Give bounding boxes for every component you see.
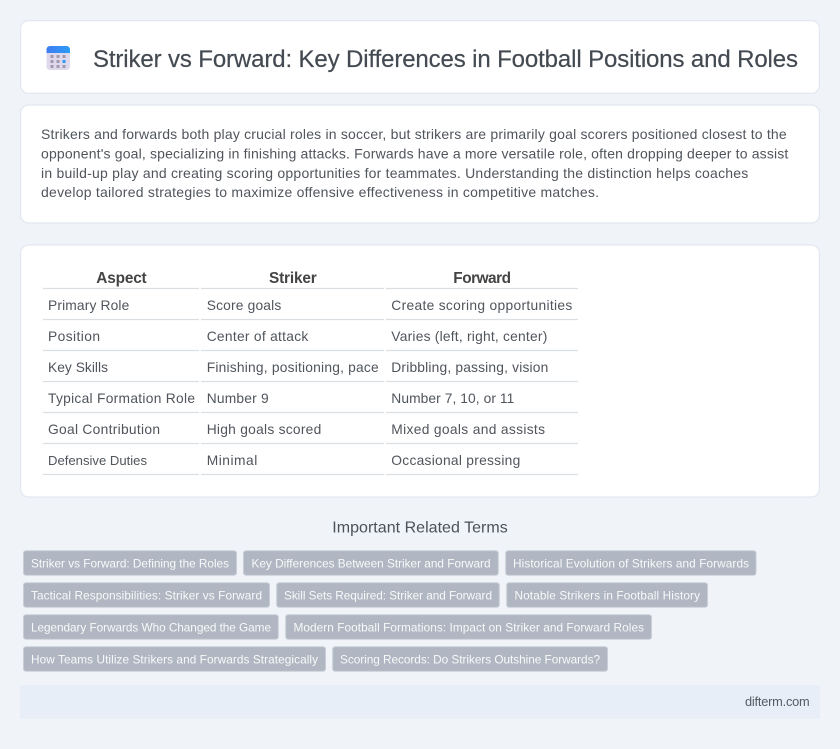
icon: calendar <box>46 46 70 70</box>
heading: important related terms: Important Related Terms <box>332 520 508 537</box>
tag <box>277 583 499 607</box>
row: defensive duties: Defensive Duties <box>48 453 147 468</box>
text block: intro: in build-up play and creating scoring opportunities for teammates. Understanding the distinction helps coaches <box>41 165 748 181</box>
text block: intro: opponent's goal, specializing in finishing attacks. Forwards have a more versatile role, often dropping deeper to assist <box>41 146 788 162</box>
tag <box>244 551 498 575</box>
row: key skills: Dribbling, passing, vision <box>391 360 548 375</box>
tag list: related terms <box>24 551 756 671</box>
row: defensive duties: Minimal <box>207 453 257 468</box>
tag <box>507 583 708 607</box>
row: primary role: Score goals <box>207 298 281 313</box>
table header: Forward <box>453 270 511 287</box>
row: primary role: Create scoring opportunities <box>391 298 572 313</box>
tag: Notable Strikers in Football History <box>514 588 700 602</box>
row: key skills <box>48 360 548 375</box>
row: position: Center of attack <box>207 329 308 344</box>
tag: How Teams Utilize Strikers and Forwards Strategically <box>31 652 318 666</box>
row: typical formation role: Typical Formation Role <box>48 391 195 406</box>
tag: Historical Evolution of Strikers and Forwards <box>513 556 749 570</box>
tag <box>24 583 270 607</box>
tag <box>24 615 278 639</box>
panel: comparison table <box>21 245 819 497</box>
row: key skills: Finishing, positioning, pace <box>207 360 379 375</box>
tag: Key Differences Between Striker and Forward <box>252 556 490 570</box>
tag <box>333 647 608 671</box>
tag: Scoring Records: Do Strikers Outshine Forwards? <box>340 652 600 666</box>
row: goal contribution: Mixed goals and assists <box>391 422 545 437</box>
footer text: site name: difterm.com <box>745 694 810 709</box>
row: defensive duties <box>48 453 520 468</box>
row: typical formation role <box>48 391 514 406</box>
text block: intro: develop tailored strategies to maximize offensive effectiveness in competitive matches. <box>41 184 599 200</box>
panel: intro paragraph <box>21 105 819 223</box>
row: position <box>48 329 547 344</box>
tag <box>506 551 756 575</box>
tag: Legendary Forwards Who Changed the Game <box>31 620 271 634</box>
table header: Striker <box>269 270 317 287</box>
row: typical formation role: Number 7, 10, or 11 <box>391 391 514 406</box>
table header <box>96 270 511 287</box>
tag: Striker vs Forward: Defining the Roles <box>31 556 229 570</box>
panel: header <box>21 21 819 93</box>
row: position: Position <box>48 329 100 344</box>
text block: intro: Strikers and forwards both play crucial roles in soccer, but strikers are primarily goal scorers positioned closest to the <box>41 126 787 142</box>
row: goal contribution <box>48 422 545 437</box>
tag: Skill Sets Required: Striker and Forward <box>284 588 492 602</box>
table header: Aspect <box>96 270 147 287</box>
row: position: Varies (left, right, center) <box>391 329 547 344</box>
row: defensive duties: Occasional pressing <box>391 453 520 468</box>
text block: intro <box>41 126 788 200</box>
tag: Modern Football Formations: Impact on Striker and Forward Roles <box>294 620 644 634</box>
tag <box>286 615 652 639</box>
row: primary role <box>48 298 572 313</box>
row: typical formation role: Number 9 <box>207 391 269 406</box>
tag <box>24 551 236 575</box>
row: goal contribution: Goal Contribution <box>48 422 160 437</box>
tag: Tactical Responsibilities: Striker vs Forward <box>31 588 262 602</box>
footer <box>20 685 820 719</box>
row: goal contribution: High goals scored <box>207 422 321 437</box>
row: primary role: Primary Role <box>48 298 130 313</box>
row: key skills: Key Skills <box>48 360 108 375</box>
tag <box>24 647 326 671</box>
title: Striker vs Forward: Key Differences in Football Positions and Roles <box>93 46 798 73</box>
